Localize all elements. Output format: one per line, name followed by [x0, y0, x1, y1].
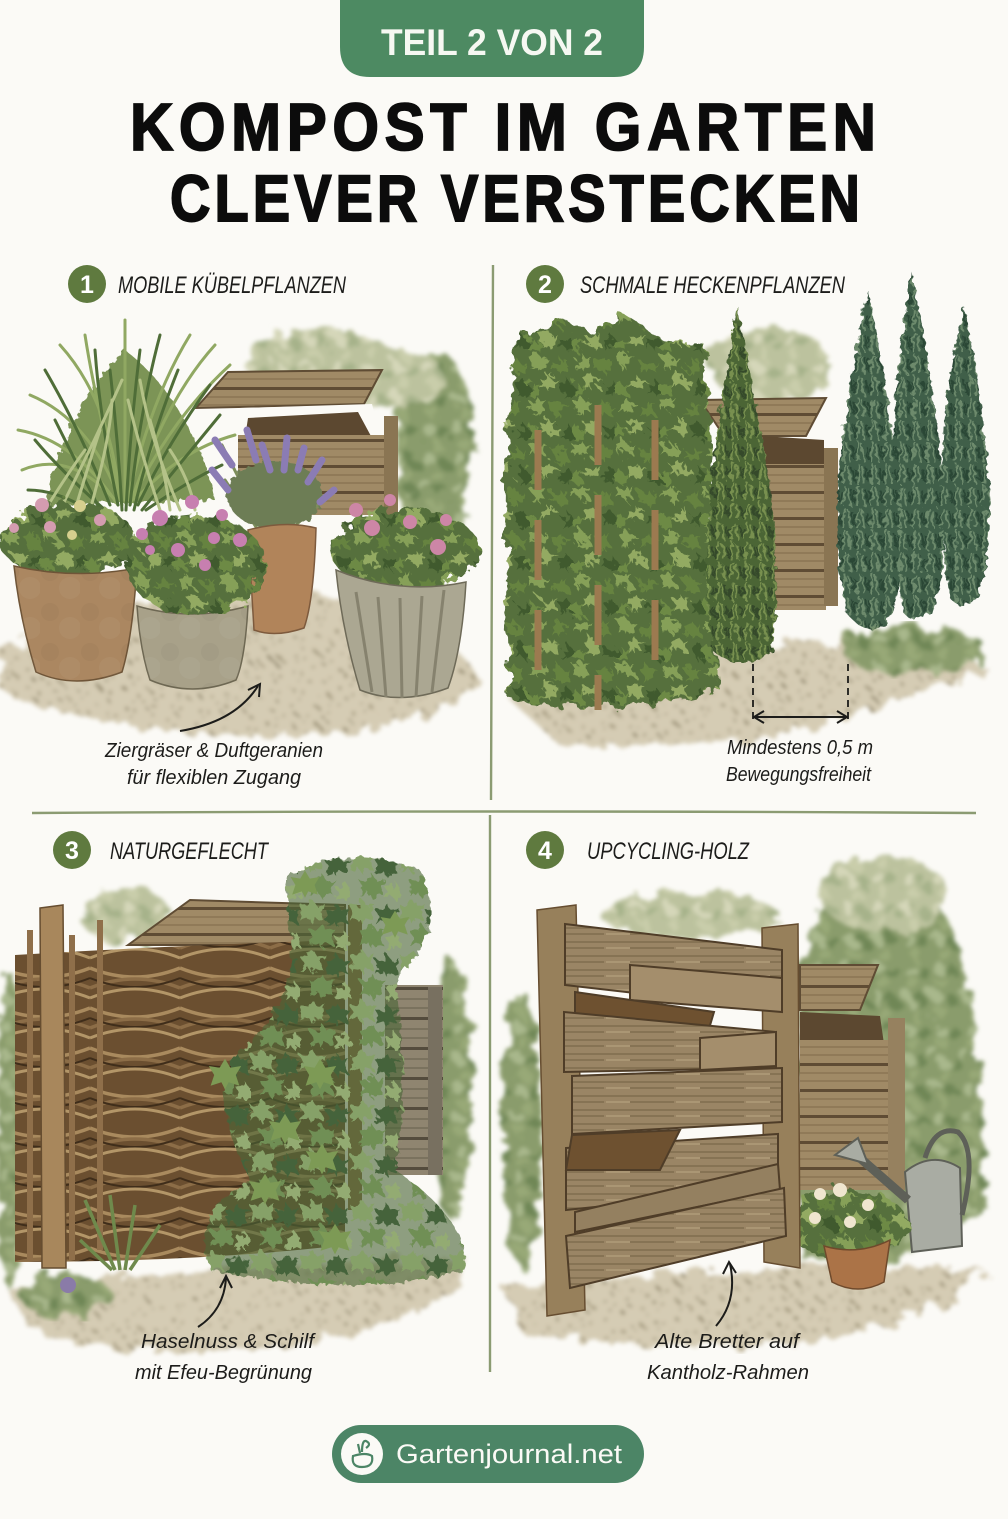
heading 3: 3 — [65, 837, 79, 865]
badge: Teil 2 von 2 — [340, 0, 644, 77]
title — [130, 90, 876, 235]
pot: right fluted stone — [336, 570, 466, 698]
caption — [104, 740, 323, 789]
icon: plant logo — [341, 1433, 383, 1475]
background foliage — [0, 887, 472, 1290]
heading 3 — [53, 831, 270, 869]
heading 3: NATURGEFLECHT — [110, 838, 270, 865]
caption: Mindestens 0,5 m — [727, 737, 873, 759]
caption — [647, 1331, 809, 1384]
caption: Ziergräser & Duftgeranien — [104, 740, 323, 762]
ground — [10, 1260, 470, 1350]
caption: Haselnuss & Schilf — [141, 1331, 317, 1353]
woven wattle fence — [15, 920, 345, 1262]
badge: Teil 2 von 2: TEIL 2 VON 2 — [381, 22, 603, 63]
pot: middle stone — [137, 606, 248, 689]
pot: back terracotta — [248, 524, 316, 634]
shrub base — [843, 626, 987, 674]
ground — [510, 640, 990, 749]
compost bin behind — [128, 900, 443, 1175]
grass tuft and flowers — [20, 1195, 160, 1317]
compost bin — [700, 398, 838, 610]
caption — [135, 1331, 317, 1384]
post on right — [348, 905, 362, 1210]
background foliage — [502, 857, 985, 1270]
plant: middle geranium — [126, 495, 266, 615]
heading 2: 2 — [538, 271, 552, 299]
wooden post — [40, 905, 66, 1268]
panel: Schmale Heckenpflanzen — [505, 265, 990, 786]
panel: Naturgeflecht — [0, 831, 472, 1384]
arrow — [198, 1276, 232, 1327]
heading 2 — [526, 265, 846, 303]
heading 4: UPCYCLING-HOLZ — [587, 838, 750, 865]
ground — [505, 1268, 985, 1346]
caption: mit Efeu-Begrünung — [135, 1362, 312, 1384]
ground — [0, 590, 480, 735]
heading 1: MOBILE KÜBELPFLANZEN — [118, 272, 347, 299]
frame posts — [537, 905, 800, 1316]
reclaimed boards — [564, 924, 786, 1288]
plant and terracotta pot — [788, 1183, 908, 1289]
heading 2: SCHMALE HECKENPFLANZEN — [580, 272, 846, 299]
cross dividers — [32, 265, 976, 1372]
heading 1 — [68, 265, 347, 303]
caption — [726, 737, 873, 786]
arrow — [716, 1262, 736, 1326]
ivy climbing — [205, 857, 465, 1285]
trellis poles — [538, 405, 655, 710]
lavender — [212, 430, 334, 530]
caption: Alte Bretter auf — [654, 1331, 802, 1353]
pot: left terracotta — [14, 566, 137, 681]
footer badge: Gartenjournal.net — [332, 1425, 644, 1483]
cypress centre — [707, 305, 776, 662]
title: KOMPOST IM GARTEN — [130, 90, 876, 165]
title: CLEVER VERSTECKEN — [170, 162, 860, 235]
dimension: 0,5 m — [753, 664, 848, 724]
plant: right geranium — [331, 494, 479, 592]
footer badge: Gartenjournal.net: Gartenjournal.net — [396, 1439, 623, 1469]
arrow — [180, 684, 260, 731]
ornamental grass — [18, 320, 235, 515]
background foliage — [710, 325, 830, 405]
watering can — [835, 1131, 969, 1252]
panel: Upcycling-Holz — [502, 831, 985, 1384]
caption: Bewegungsfreiheit — [726, 764, 872, 786]
compost bin — [800, 965, 905, 1190]
plant: left geranium — [0, 498, 136, 578]
ivy hedge — [505, 315, 718, 708]
heading 1: 1 — [80, 271, 94, 299]
heading 4: 4 — [538, 837, 552, 865]
heading 4 — [526, 831, 750, 869]
panel: Mobile Kübelpflanzen — [0, 265, 480, 789]
row of cypresses — [837, 272, 990, 629]
caption: für flexiblen Zugang — [127, 767, 301, 789]
caption: Kantholz-Rahmen — [647, 1362, 809, 1384]
background foliage — [245, 330, 475, 550]
compost bin — [196, 370, 398, 516]
